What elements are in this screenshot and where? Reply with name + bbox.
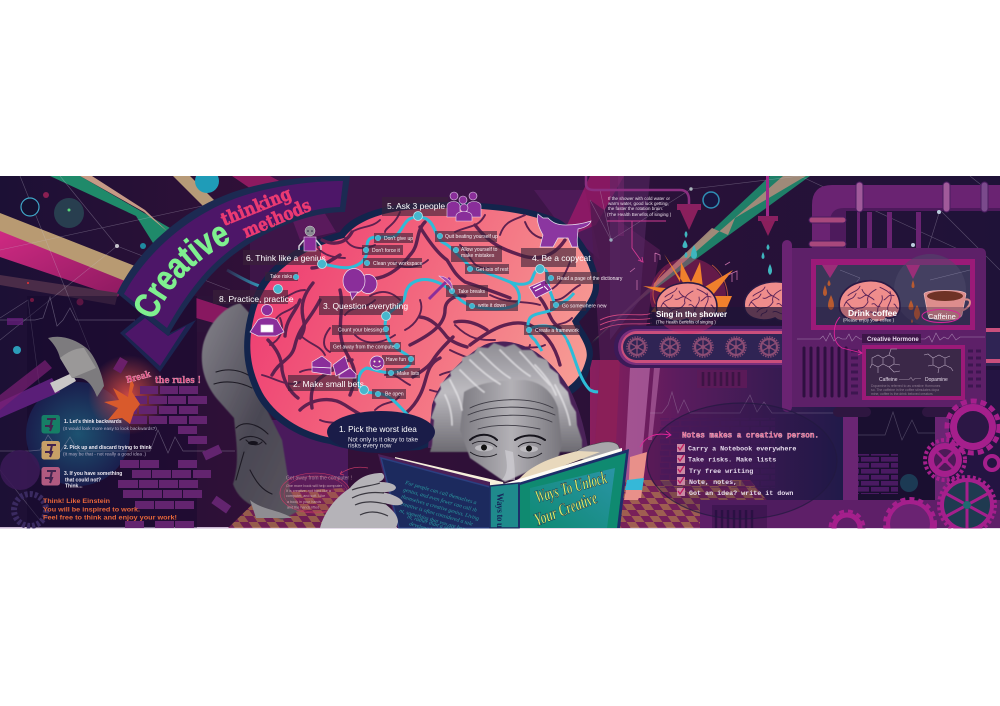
title: Creative: Creative — [134, 226, 229, 316]
get away note: computer, and soft. Like — [286, 494, 325, 498]
closing orange text: Think! Like Einstein — [43, 498, 110, 505]
description: mine, coffee is the drink beloved creators — [871, 392, 933, 396]
notes checklist — [677, 444, 796, 498]
back cover text: developed. — [408, 521, 433, 534]
sub steps: Get away from the computer — [333, 344, 396, 350]
description — [871, 384, 941, 396]
icon: open book — [529, 280, 552, 298]
gear: big lower — [939, 477, 995, 533]
back cover text: creative is often considered a tale — [399, 500, 474, 528]
molecule: dopamine — [924, 354, 953, 373]
hormone panel — [862, 345, 965, 400]
break the rules heading: the rules ! — [155, 376, 201, 386]
pick the worst idea — [327, 411, 435, 453]
step 2: make small bets — [288, 356, 406, 399]
top pipes — [809, 182, 1000, 248]
central Einstein — [428, 342, 588, 482]
orange burst — [104, 378, 140, 424]
back cover text: genius, and even fewer can call th — [402, 486, 478, 514]
music notes — [600, 253, 737, 330]
sub steps of ask 3 people: Allow yourself to — [461, 247, 498, 253]
rule 1: (It would look more easy to look backwards?) — [63, 426, 157, 431]
pick the worst idea: risks every now — [348, 442, 392, 450]
step 6: think like a genius: 6. Think like a genius — [246, 253, 326, 263]
sub steps: Count your blessings — [338, 328, 385, 334]
rule 3 — [42, 467, 122, 490]
get away note: Get away from the computer ! — [286, 476, 352, 482]
shower note — [607, 196, 672, 217]
label: caffeine — [922, 310, 960, 322]
brain in screen — [839, 281, 900, 322]
background light rays — [0, 176, 810, 360]
title: methods: methods — [240, 195, 314, 243]
sing in the shower label — [650, 307, 784, 325]
screen: drink coffee — [811, 254, 975, 330]
sub steps of ask 3 people: Don't give up — [384, 236, 413, 242]
step 2: make small bets: 2. Make small bets — [293, 379, 364, 389]
shower note: If the shower with cold water or — [608, 196, 671, 201]
notes checklist: Carry a Notebook everywhere — [688, 446, 796, 454]
book title: Your Creative — [531, 487, 600, 530]
brain on conveyor: singing — [656, 283, 717, 322]
icon: people group — [447, 192, 481, 221]
arrow to hormone panel — [834, 317, 862, 355]
notes checklist: Got an idea? write it down — [689, 490, 793, 498]
rule 3: that could not? — [65, 478, 101, 484]
description: Dopamine is referred to as creative Hormones — [871, 384, 941, 388]
step 4: be a copycat: 4. Be a copycat — [532, 253, 591, 263]
closing orange text — [43, 498, 177, 522]
step 5: ask 3 people: 5. Ask 3 people — [387, 201, 445, 211]
book title: Ways To Unlock — [533, 467, 609, 507]
icon: pickaxe — [429, 276, 452, 299]
icon: hammer — [0, 337, 104, 418]
molecule: caffeine — [870, 349, 900, 373]
step 6: think like a genius — [243, 226, 326, 281]
bookmarks — [624, 452, 647, 500]
back cover text — [398, 480, 480, 540]
sub steps of ask 3 people — [362, 231, 509, 274]
icon: reader — [250, 304, 284, 336]
closing orange text: Feel free to think and enjoy your work! — [43, 514, 177, 522]
label: drink coffee — [843, 308, 897, 322]
get away note — [280, 467, 368, 513]
get away note: It is creative, not hard like a — [286, 489, 332, 493]
left hand — [320, 473, 403, 528]
sub steps of ask 3 people: Clean your workspace — [373, 261, 423, 267]
spine — [490, 483, 519, 528]
brain veins — [262, 212, 580, 430]
back cover text: themselves a creative genius. Living — [400, 494, 480, 522]
sub steps of ask 3 people: Quit beating yourself up — [445, 234, 498, 240]
step 3: question everything — [319, 268, 420, 378]
sub steps of ask 3 people: make mistakes — [461, 253, 495, 259]
sub steps: Create a framework — [535, 328, 579, 334]
arrow from shower note — [607, 221, 666, 262]
get away note: a book in your hands — [287, 500, 321, 504]
right background structures — [590, 176, 1000, 528]
step 8: practice, practice — [213, 284, 294, 336]
back cover text: th, rather than a skill that can be — [406, 514, 479, 540]
rule 1 — [42, 415, 157, 434]
icon: speech bubbles — [343, 268, 377, 300]
shower pipes and nozzles — [586, 176, 778, 275]
icon: coffee cup — [924, 290, 970, 320]
teal path through the brain — [322, 217, 617, 426]
arrow into notes — [640, 431, 671, 447]
front cover — [518, 449, 629, 528]
title: Creative — [134, 226, 229, 316]
step 3: question everything: 3. Question everything — [323, 301, 408, 311]
sub steps of ask 3 people: Get lots of rest — [476, 267, 509, 273]
gear: bottom — [885, 499, 935, 549]
machine — [782, 240, 1000, 412]
sub steps: Go somewhere new — [562, 304, 607, 310]
sub steps: breaks: Take breaks — [458, 289, 485, 295]
icon: cake slices — [312, 356, 356, 378]
labels: Dopamine — [925, 377, 948, 383]
open book — [378, 448, 629, 540]
right hand — [572, 442, 623, 462]
sub steps of ask 3 people: Don't force it — [372, 248, 401, 254]
labels: Caffeine — [879, 377, 898, 383]
sub step: be open: Be open — [385, 392, 404, 398]
teal line left tail — [227, 265, 322, 289]
notes checklist: Take risks. Make lists — [688, 456, 776, 464]
sub steps: breaks — [446, 285, 518, 311]
label: drink coffee: (Please enjoy your coffee ) — [843, 318, 895, 322]
label: drink coffee: Drink coffee — [848, 308, 897, 318]
step 5: ask 3 people — [382, 192, 481, 221]
background panel — [0, 176, 1000, 528]
icon: cat — [537, 214, 591, 247]
back cover text: nt, something that you are born wi — [398, 508, 475, 535]
get away note: and the hands lifted — [287, 506, 319, 510]
pick the worst idea: 1. Pick the worst idea — [339, 425, 417, 434]
icon: smiley — [370, 356, 384, 370]
book title — [531, 467, 609, 530]
sing in the shower label: (The Health Benefits of singing ) — [656, 320, 716, 324]
sub steps — [524, 272, 623, 335]
step 4: be a copycat — [521, 214, 623, 335]
gear: large ring — [947, 401, 999, 453]
closing orange text: You will be inspired to work. — [43, 506, 140, 514]
title banner — [117, 176, 350, 372]
description: so. The caffeine in the coffee stimulates dopa — [871, 388, 939, 392]
sub steps: Make lists — [397, 371, 420, 377]
creative hormone heading: Creative Hormone — [867, 337, 919, 343]
sub steps: Have fun — [386, 357, 406, 363]
rule 3: Think... — [65, 484, 83, 490]
left cover — [378, 454, 490, 528]
sub steps: breaks: write it down — [478, 303, 506, 309]
gear: spoked — [925, 440, 965, 480]
title: thinking: thinking — [218, 183, 295, 231]
rule 2: (It may be that - not really a good idea .) — [63, 452, 147, 456]
break the rules heading — [125, 370, 201, 386]
notes heading: Notes makes a creative person. — [682, 430, 819, 440]
brain on conveyor: second — [744, 282, 805, 321]
gear: bottom left — [830, 511, 864, 545]
rule 2 — [42, 441, 152, 460]
brick wall — [118, 386, 231, 528]
back cover text: For people can call themselves a — [403, 480, 477, 506]
creative hormone heading — [862, 334, 921, 343]
brain — [244, 202, 599, 451]
break the rules heading: Break — [125, 370, 153, 386]
steps on right of brain — [362, 231, 518, 311]
conveyor belt — [614, 326, 813, 368]
shower note: (The Health Benefits of singing ) — [607, 212, 672, 217]
shower note: the faster the rotation brain. — [608, 206, 663, 211]
sub steps: Read a page of the dictionary — [557, 276, 623, 282]
left Einstein face — [202, 303, 348, 528]
shower note: warm water, good luck getting, — [608, 201, 669, 206]
constellation lines and planets — [0, 169, 1000, 520]
notes ellipse — [647, 403, 837, 519]
gears — [830, 401, 999, 549]
left dark panel with pulse line — [0, 296, 235, 528]
labels — [879, 377, 948, 383]
rule 3: 3. If you have something — [64, 471, 122, 477]
rule 2: 2. Pick up and discard trying to think — [64, 445, 152, 451]
pick the worst idea: Not only is it okay to take — [348, 436, 418, 444]
spine: Ways to u — [495, 493, 505, 528]
burst behind brain — [643, 254, 733, 334]
rule 1: 1. Let's think backwards — [64, 419, 122, 425]
get away note: One more book will help computer — [286, 484, 343, 488]
gear: small ring — [985, 456, 999, 470]
sub steps — [330, 325, 420, 378]
sing in the shower label: Sing in the shower — [656, 310, 727, 319]
label: caffeine: Caffeine — [928, 312, 956, 321]
notes checklist: Try free writing — [689, 468, 753, 476]
step 8: practice, practice: 8. Practice, practice — [219, 294, 294, 304]
icon: robot — [299, 226, 321, 251]
sub step: take risks: Take risks — [270, 274, 293, 280]
notes checklist: Note, notes, — [689, 479, 737, 487]
